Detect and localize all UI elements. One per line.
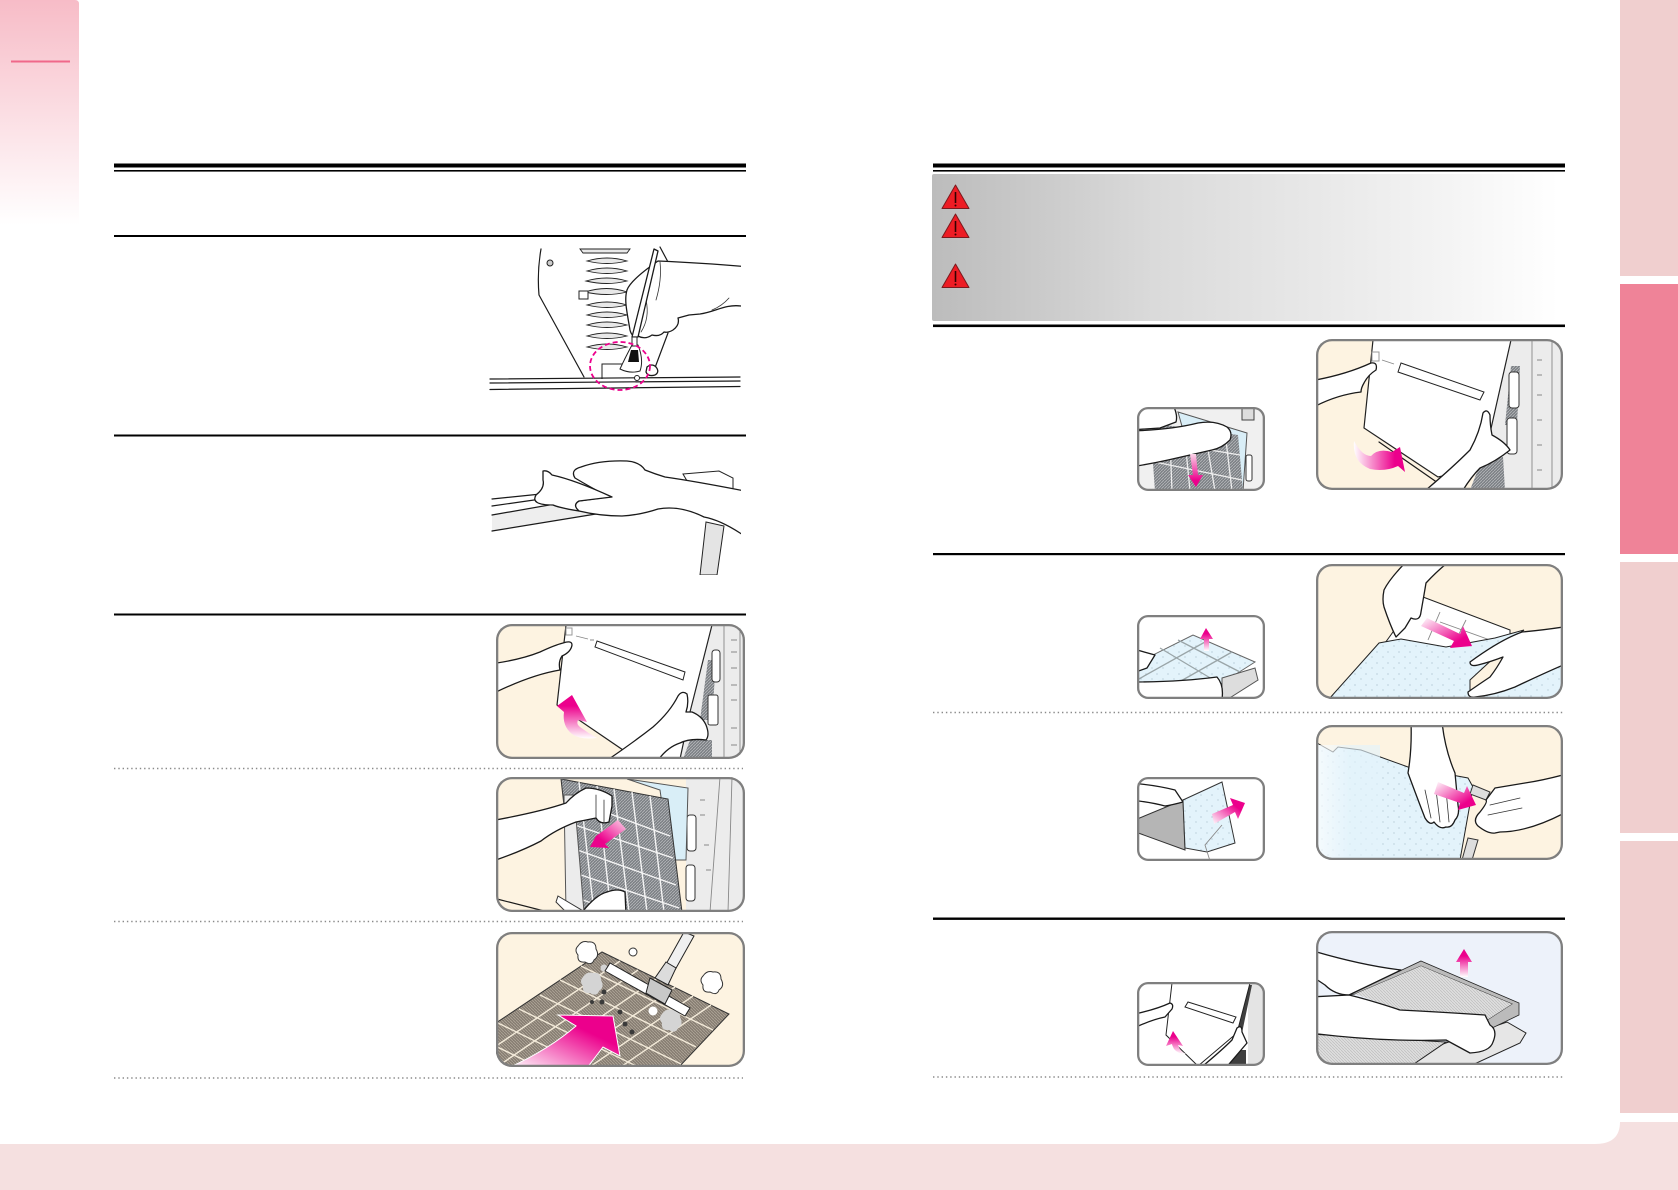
highlight circle [590,342,650,390]
illustration card: fitting the sheet, small [1130,777,1265,861]
left column rules [114,164,746,1078]
arrow [1421,618,1472,648]
icon: warning triangle 3 [942,264,969,288]
arrow [590,820,626,848]
arrow [1456,949,1472,977]
illustration card: peeling the sheet, large [1316,560,1570,699]
illustration card: removing the main filter, large [1310,931,1563,1066]
bottom page band [0,1122,1678,1190]
illustration card: opening the cover, small [1130,405,1265,491]
illustration card: removing the pre-filter [490,777,745,921]
warning box [932,174,1565,321]
illustration card: peeling the sheet, small [1137,615,1265,699]
arrow [1212,798,1245,824]
arrow [1434,782,1476,810]
vacuum nozzle [605,932,694,1016]
arrow [557,695,597,738]
icon: warning triangle 1 [942,185,969,208]
icon: warning triangle 2 [942,214,969,238]
arrow [1188,454,1203,487]
illustration card: vacuuming the filter [496,932,745,1067]
arrow [1166,1031,1186,1054]
illustration: brushing the sensor [490,247,760,390]
page corner tab [0,0,79,225]
side navigation tabs [1620,0,1678,1113]
illustration card: fitting the sheet, large [1316,722,1570,860]
illustration card: lifting the front cover [490,624,745,765]
arrow [1354,441,1405,472]
illustration: wiping with a cloth [492,461,760,575]
arrow [508,1015,620,1068]
illustration card: removing the main filter, small [1130,982,1265,1070]
dust clouds [576,942,723,1034]
illustration card: opening the cover, large [1310,339,1563,495]
right column rules [933,164,1565,1077]
arrow [1200,628,1213,651]
